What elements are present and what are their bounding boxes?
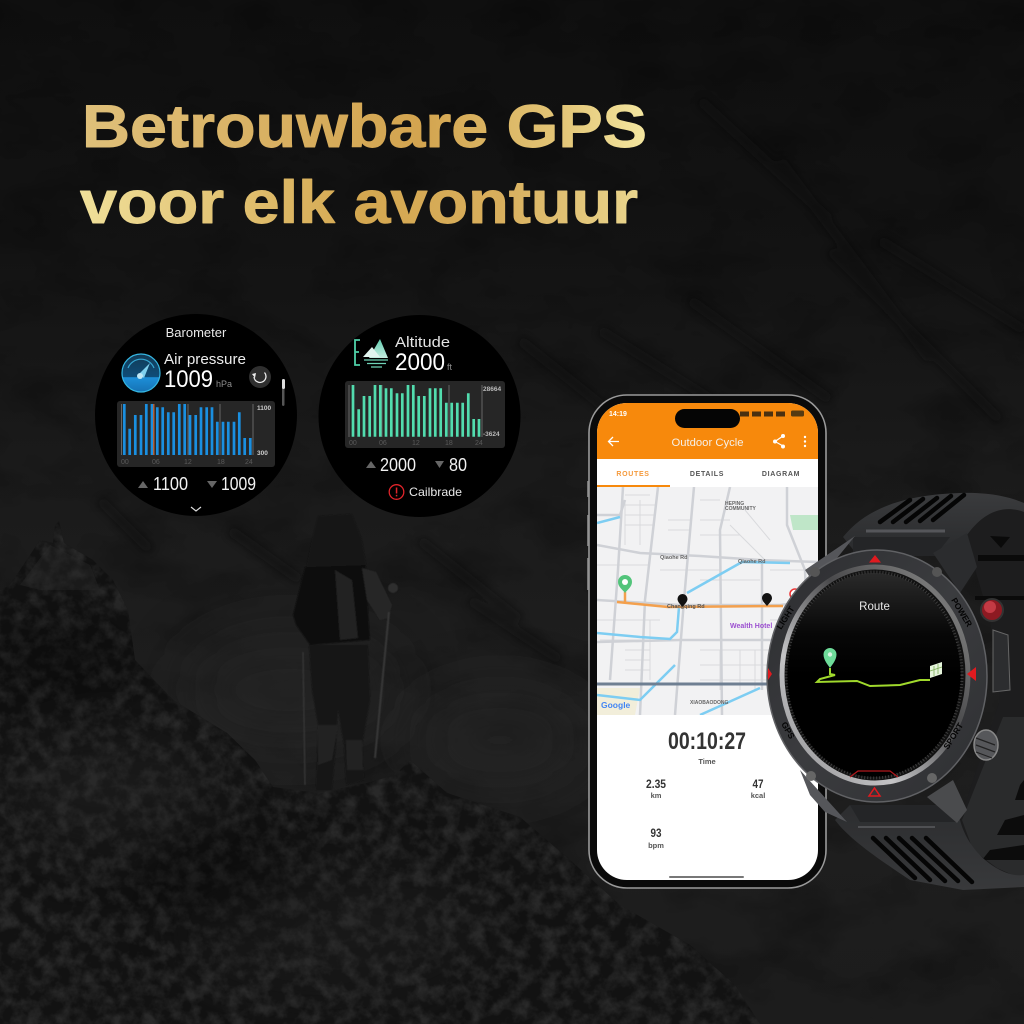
bar chart: air pressure: 12 — [184, 459, 192, 466]
watch strap bottom — [835, 805, 1024, 890]
workout stats: bpm — [648, 841, 664, 850]
watch screen: altitude — [318, 315, 520, 517]
route heading: Route — [859, 601, 890, 613]
air pressure value: 1009 — [164, 366, 213, 393]
watch screen: barometer — [95, 314, 297, 516]
workout stats: 93 — [650, 826, 662, 840]
max and min altitude — [366, 455, 467, 475]
title — [80, 93, 647, 236]
bar chart: air pressure: 00 — [121, 459, 129, 466]
scrollbar — [282, 379, 285, 406]
bar chart: air pressure: 300 — [257, 450, 268, 457]
route line — [817, 668, 930, 686]
air pressure value: hPa — [216, 379, 232, 389]
map: Google — [601, 700, 631, 710]
workout stats — [646, 728, 765, 878]
bar chart: altitude: 00 — [349, 440, 357, 447]
bar chart: altitude: -3624 — [483, 431, 500, 438]
workout stats: 47 — [752, 777, 764, 791]
max and min pressure: 1100 — [153, 474, 188, 494]
bar chart: air pressure: 06 — [152, 459, 160, 466]
tabs: DIAGRAM — [762, 471, 800, 478]
map: Wealth Hotel — [730, 623, 772, 630]
smartphone — [587, 395, 826, 888]
workout stats: 00:10:27 — [668, 728, 746, 755]
map: HEPING — [725, 501, 744, 507]
bar chart: air pressure: 1100 — [257, 405, 271, 412]
map — [597, 487, 818, 715]
icon: chevron down — [191, 507, 201, 511]
icon: start pin — [824, 648, 836, 668]
watch strap top — [843, 493, 1024, 556]
side buttons — [587, 481, 589, 590]
watch screen: route — [786, 572, 962, 778]
app header: 14:19 — [609, 411, 627, 418]
watch bezel: SPORT — [941, 720, 966, 751]
watch bezel: GPS — [779, 720, 797, 741]
workout stats: Time — [698, 757, 716, 766]
back of strap — [950, 509, 1024, 885]
tabs: DETAILS — [690, 471, 724, 478]
app header: Outdoor Cycle — [672, 437, 744, 449]
bar chart: altitude — [345, 381, 505, 448]
altitude value: 2000 — [395, 349, 445, 376]
dynamic island — [675, 409, 740, 428]
crown and side buttons — [800, 533, 1010, 823]
heading: barometer: Barometer — [166, 325, 227, 340]
air pressure value — [164, 351, 246, 393]
title: Betrouwbare GPS — [82, 93, 647, 160]
max and min pressure: 1009 — [221, 474, 256, 494]
icon: altitude mountains — [355, 339, 388, 367]
hiker silhouette — [293, 514, 398, 790]
bar chart: altitude: 12 — [412, 440, 420, 447]
workout stats: kcal — [751, 791, 765, 800]
icon: finish flag — [930, 662, 942, 680]
bar chart: air pressure: 24 — [245, 459, 253, 466]
workout stats: 2.35 — [646, 777, 666, 791]
bar chart: air pressure — [117, 401, 275, 467]
tabs: ROUTES — [616, 471, 650, 478]
smartwatch — [767, 493, 1024, 890]
tabs — [597, 471, 799, 487]
map: Changqing Rd — [667, 604, 705, 610]
map: COMMUNITY — [725, 506, 756, 512]
bar chart: altitude: 06 — [379, 440, 387, 447]
icon: pressure gauge — [122, 354, 160, 392]
bar chart: altitude: 28664 — [483, 386, 501, 393]
bar chart: air pressure: 18 — [217, 459, 225, 466]
watch bezel — [767, 550, 987, 802]
map: Qiaohe Rd — [660, 555, 688, 561]
calibrate warning — [389, 485, 462, 499]
altitude value — [395, 334, 453, 376]
foreground rocks — [0, 523, 752, 1024]
air pressure value: Air pressure — [164, 351, 246, 368]
phone body — [589, 395, 826, 888]
map: Qiaohe Rd — [738, 559, 766, 565]
watch bezel: POWER — [949, 596, 974, 629]
watch bezel: LIGHT — [774, 604, 797, 631]
icon: refresh button — [249, 366, 271, 388]
app screen — [597, 403, 818, 878]
calibrate warning: Cailbrade — [409, 485, 462, 499]
max and min pressure — [138, 474, 256, 494]
max and min altitude: 80 — [449, 455, 467, 475]
altitude value: Altitude — [395, 334, 450, 351]
bar chart: altitude: 18 — [445, 440, 453, 447]
bar chart: altitude: 24 — [475, 440, 483, 447]
max and min altitude: 2000 — [380, 455, 416, 475]
workout stats: km — [651, 791, 662, 800]
title: voor elk avontuur — [80, 169, 638, 236]
map: XIAOBAODONG — [690, 700, 728, 706]
altitude value: ft — [447, 362, 453, 372]
app header — [597, 403, 818, 459]
